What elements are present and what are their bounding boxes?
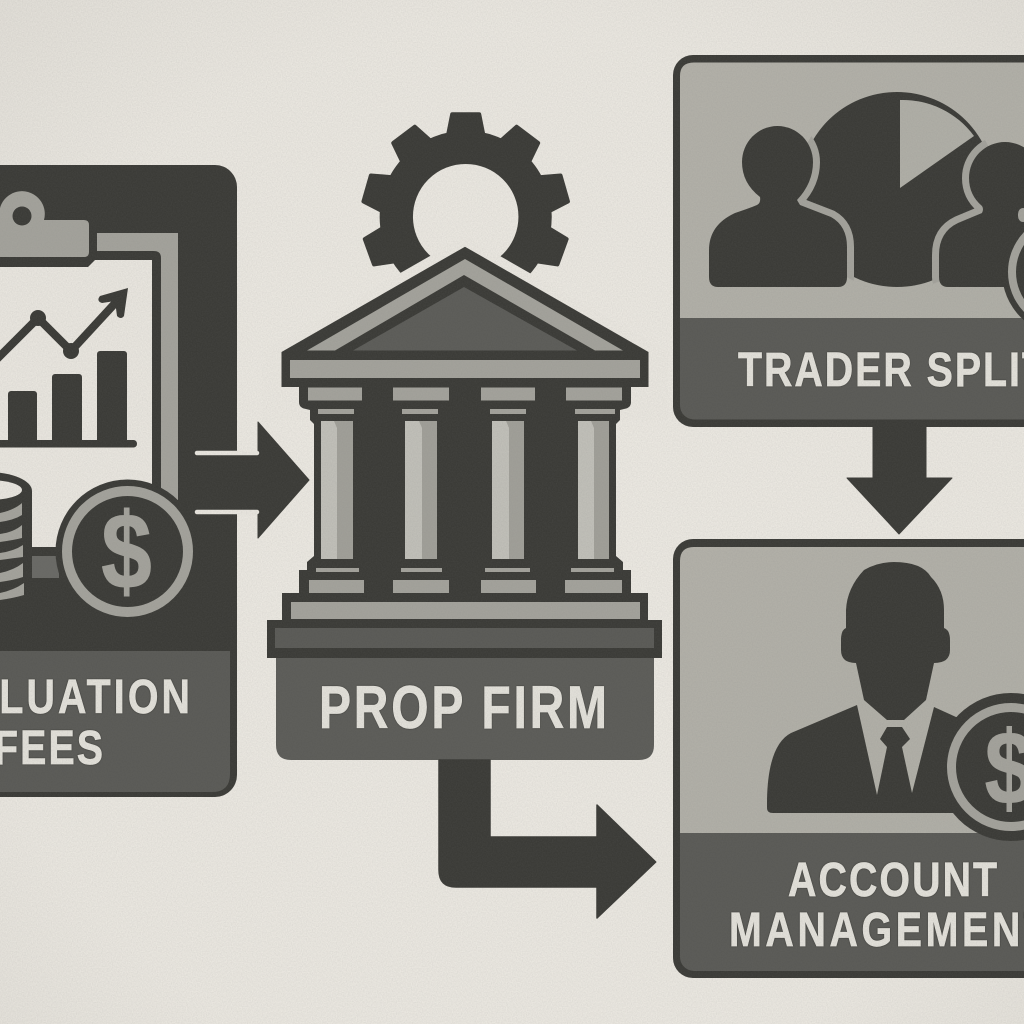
bar chart	[0, 351, 137, 448]
heading: prop firm: PROP FIRM	[319, 674, 607, 741]
person halo on pie	[797, 136, 988, 284]
line chart with arrow	[0, 288, 128, 360]
clipboard paper	[0, 260, 152, 547]
capitals	[308, 388, 622, 414]
panel: evaluation fees	[0, 165, 237, 797]
label band	[0, 651, 230, 792]
coin connector	[32, 556, 59, 578]
arrow: firm to account management	[439, 760, 656, 918]
heading: account management	[729, 853, 1024, 957]
columns	[321, 421, 609, 559]
icon: dollar coin	[937, 693, 1024, 841]
icon: dollar coin	[1002, 208, 1024, 336]
icon: gear	[362, 114, 569, 312]
heading: evaluation fees	[0, 670, 190, 775]
icon: dollar coin	[56, 480, 200, 624]
panel: prop firm label	[276, 658, 654, 760]
icon: manager silhouette	[767, 562, 975, 813]
pie chart	[800, 92, 994, 287]
column block	[267, 387, 662, 658]
icon: bank building	[262, 236, 668, 658]
pediment	[282, 247, 648, 387]
steps	[275, 602, 654, 648]
clipboard clip	[0, 191, 89, 257]
icon: trader left	[709, 126, 847, 287]
panel: trader split	[673, 55, 1024, 427]
gear gap	[262, 236, 668, 420]
arrow: split to account management	[847, 427, 952, 534]
arrow: fees to firm	[197, 422, 309, 538]
column bases	[309, 568, 622, 593]
heading: account management: ACCOUNT	[788, 853, 997, 907]
clipboard frame	[97, 233, 178, 500]
icon: trader right	[939, 142, 1024, 287]
coin stack	[0, 472, 32, 600]
icon: dollar coin: $	[101, 492, 152, 612]
panel: account management	[673, 539, 1024, 978]
